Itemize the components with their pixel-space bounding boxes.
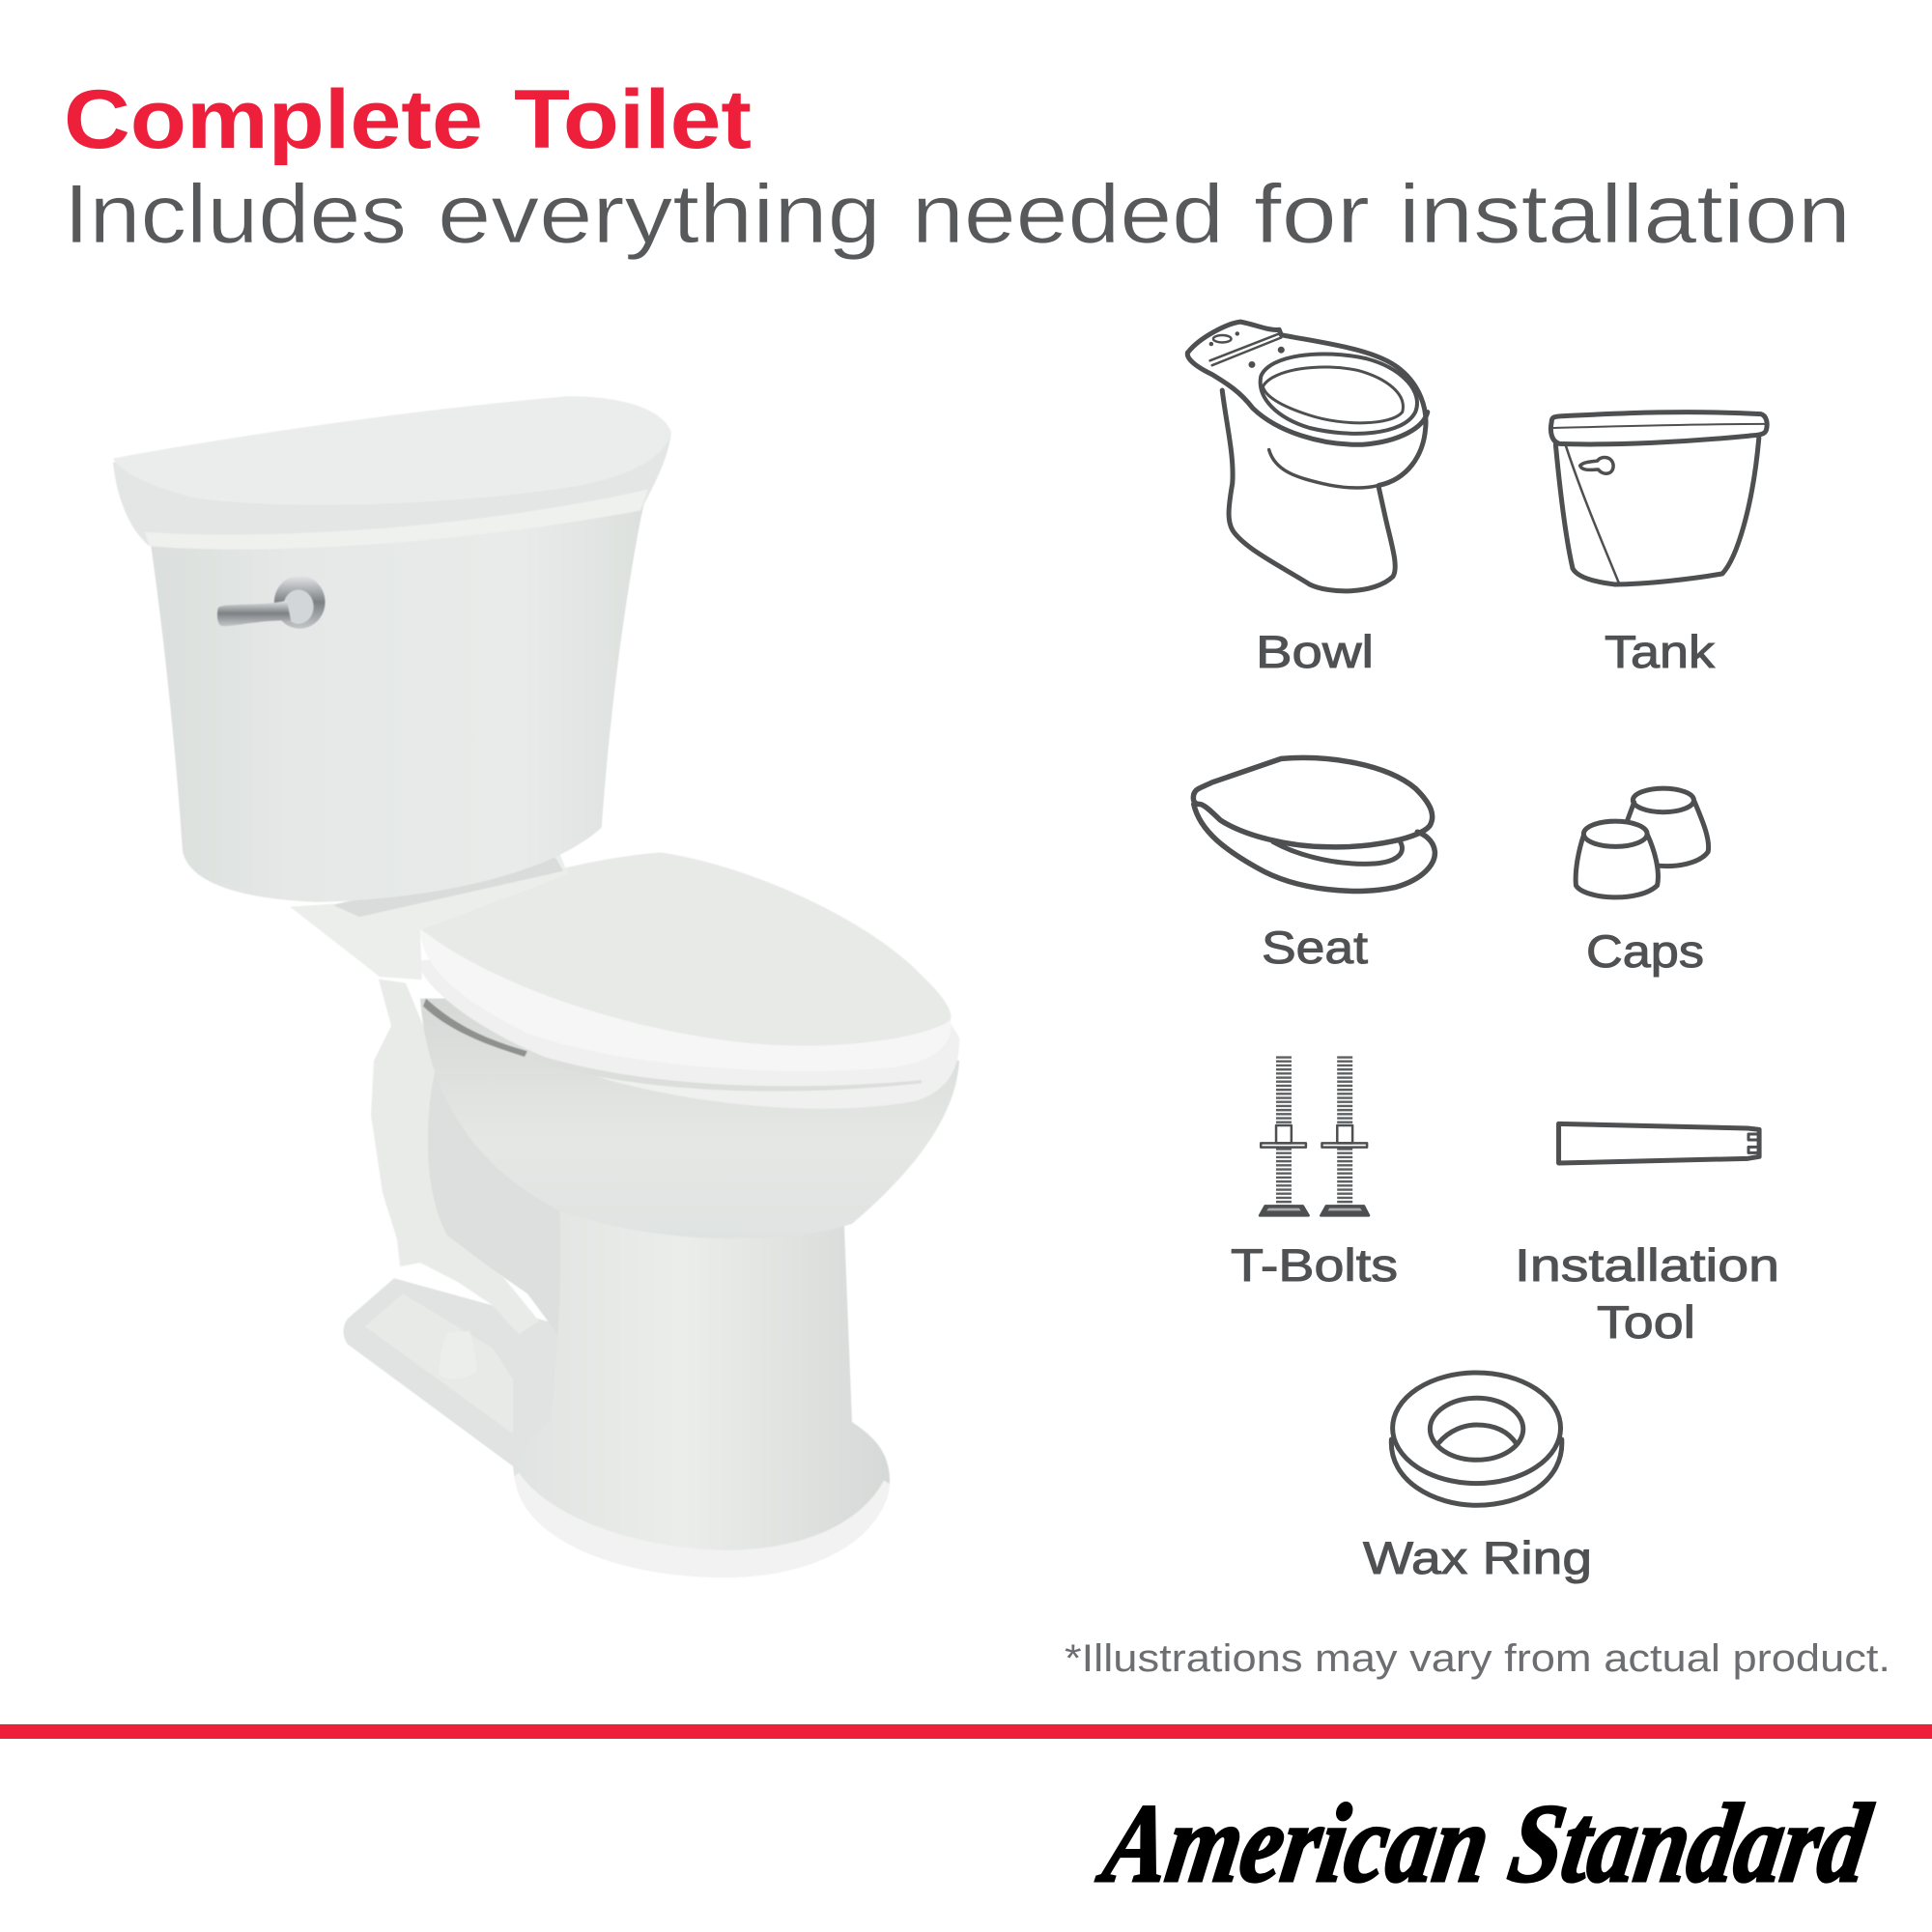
bowl [420, 999, 959, 1239]
tank body [142, 494, 646, 902]
pedestal and foot [513, 1201, 890, 1577]
seat ring [417, 952, 959, 1109]
label: Installation Tool: Tool [1597, 1296, 1695, 1348]
icon: wax ring [1391, 1373, 1562, 1505]
deck under tank [290, 852, 568, 980]
title: Complete Toilet: Complete [64, 73, 483, 166]
base plate [344, 1278, 559, 1466]
flush handle [217, 576, 326, 629]
label: Seat: Seat [1262, 922, 1368, 973]
label: Installation Tool [1515, 1239, 1779, 1348]
seat lid [420, 852, 952, 1071]
label: Caps: Caps [1586, 925, 1704, 977]
label: Bowl: Bowl [1256, 626, 1374, 677]
icon: tank [1550, 412, 1767, 584]
subtitle: installation [1399, 168, 1851, 261]
icon: installation tool [1559, 1123, 1759, 1163]
icon: bowl [1187, 322, 1428, 591]
subtitle: everything [438, 168, 881, 261]
red divider bar [0, 1724, 1932, 1739]
subtitle: Includes [64, 168, 407, 261]
icon: seat [1193, 757, 1435, 891]
trapway arch [371, 979, 539, 1334]
floor bolt cap [440, 1331, 476, 1379]
icon: T-bolts [1260, 1056, 1369, 1215]
icon: caps [1576, 788, 1709, 897]
label: Wax Ring: Wax Ring [1363, 1532, 1592, 1583]
tank lid [113, 396, 671, 550]
underside behind trapway [423, 1061, 574, 1337]
subtitle: needed [912, 168, 1224, 261]
label: T-Bolts: T-Bolts [1231, 1239, 1398, 1291]
footnote: *Illustrations may vary from actual product. [1065, 1637, 1890, 1680]
label: Tank: Tank [1605, 626, 1716, 677]
toilet product illustration [113, 396, 959, 1577]
title: Complete Toilet: Toilet [514, 73, 752, 166]
label: Installation Tool: Installation [1515, 1239, 1779, 1291]
subtitle: for [1254, 168, 1370, 261]
